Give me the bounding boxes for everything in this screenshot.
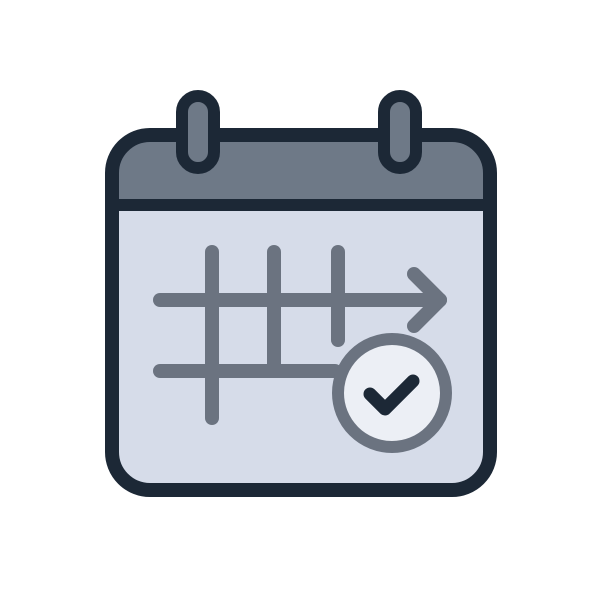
schedule grid with arrow bbox=[160, 252, 440, 418]
binder rings bbox=[182, 96, 416, 168]
check badge bbox=[338, 339, 446, 447]
calendar body bbox=[112, 135, 490, 490]
